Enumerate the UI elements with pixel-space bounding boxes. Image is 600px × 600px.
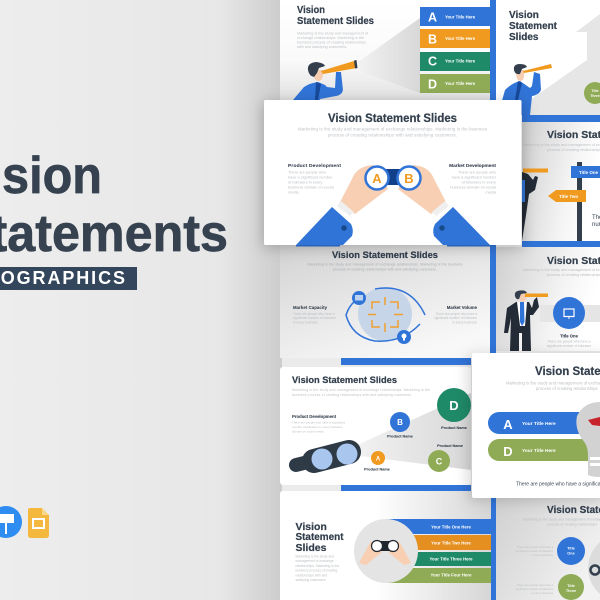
text block left lower: significant number of followers — [515, 587, 554, 591]
text block: Marketing is the study and management of exchange relationships. Marketing is the business — [298, 126, 487, 132]
text block: business process of creating — [296, 568, 337, 572]
caption: significant number of followers — [547, 344, 592, 348]
pill D: Your Title Here — [522, 448, 556, 454]
label right: significant number of followers — [434, 316, 477, 320]
label left: in every business — [293, 320, 318, 324]
signpost — [548, 162, 600, 241]
text block left upper: There are people who have a — [517, 545, 553, 549]
text block: process of creating relationships — [547, 273, 600, 277]
product B: Product Name — [387, 434, 413, 438]
title three circle — [558, 574, 584, 600]
label: domain on social media. — [292, 430, 325, 434]
list item C — [420, 52, 490, 71]
caption — [547, 334, 592, 348]
icon: man with telescope — [498, 64, 552, 115]
panel: slide with lettered list — [280, 0, 491, 100]
product D: Product Name — [441, 426, 467, 430]
product C — [428, 444, 463, 472]
icon: man with telescope — [504, 290, 548, 351]
blue circle with icon — [553, 297, 585, 329]
icon: binoculars — [296, 444, 358, 470]
bar four: Your Title Four Here — [431, 572, 472, 578]
icon: light bulb — [576, 402, 600, 477]
list item C: Your Title Here — [445, 58, 476, 64]
label left: significant number of followers — [293, 316, 336, 320]
heading: Vision — [297, 4, 325, 16]
text block — [506, 380, 600, 391]
title one circle: One — [567, 552, 575, 556]
shadow under popup slide — [468, 355, 600, 501]
text block: relationships with and — [296, 574, 327, 578]
list item D: Your Title Here — [445, 81, 476, 86]
product D — [437, 388, 471, 430]
left label: have a significant number — [288, 174, 333, 180]
text block — [292, 388, 430, 397]
panel: signpost slide — [522, 122, 600, 241]
panel: bottom right slide — [496, 498, 600, 600]
text block: exchange relationships. Marketing is the — [297, 36, 364, 40]
product C: C — [436, 456, 443, 466]
label right: Market Volume — [447, 305, 478, 310]
text block: process of creating relationships — [547, 148, 600, 152]
icon: light bulb — [397, 330, 411, 344]
bar three: Your Title Three Here — [429, 556, 473, 562]
product A — [364, 451, 390, 472]
heading: Statement — [509, 21, 558, 32]
text block — [308, 262, 463, 272]
panel: binoculars product slide — [280, 367, 471, 485]
circle with hands and binoculars — [354, 519, 418, 583]
signpost: Title One — [579, 170, 599, 175]
heading — [509, 10, 558, 43]
text block left upper: significant number of followers — [515, 549, 554, 553]
bar three — [386, 552, 491, 566]
text block — [296, 554, 339, 582]
list item A: A — [428, 10, 437, 24]
label right — [434, 305, 478, 324]
right label: have a significant number — [452, 174, 497, 180]
text block left lower: There are people who have a — [517, 583, 553, 587]
blue divider middle — [490, 245, 496, 353]
text block: process of creating relationships — [547, 522, 597, 526]
pill A: Your Title Here — [522, 421, 556, 427]
left label: business domain on social — [288, 184, 334, 190]
panel: slide top right — [496, 0, 600, 115]
label left: Market Capacity — [293, 305, 328, 310]
text block: Marketing is the study and management of exchange relationships. Marketing is the business — [308, 262, 463, 266]
text block left upper: in every business — [531, 553, 554, 557]
icon: man with telescope — [293, 60, 358, 100]
product C: Product Name — [437, 444, 463, 448]
background — [0, 0, 282, 600]
list item A — [420, 7, 490, 26]
label left: There are people who have a — [293, 312, 335, 316]
label: Product Development — [292, 414, 337, 419]
product D: D — [449, 398, 459, 413]
blue band — [341, 358, 471, 365]
text block: process of creating relationships with and satisfying customers. — [333, 268, 437, 272]
heading: Slides — [509, 32, 539, 43]
title one circle: Title — [567, 546, 575, 550]
main title — [0, 147, 228, 263]
bar one: Your Title One Here — [431, 524, 471, 530]
text block — [298, 126, 487, 138]
pill A: A — [503, 417, 513, 432]
title three circle: Three — [566, 589, 576, 593]
green circle: Title — [591, 89, 599, 93]
blue divider top — [490, 0, 496, 115]
text block: business process of creating relationships — [297, 40, 366, 44]
light beam — [358, 18, 420, 93]
left label: Product Development — [288, 163, 341, 169]
text block — [297, 32, 368, 49]
heading: Vision — [509, 10, 539, 21]
pill D: D — [503, 444, 513, 459]
label: number of followers in every business — [292, 425, 343, 429]
list item D: D — [428, 78, 437, 92]
panel: popup bulb slide — [472, 353, 600, 498]
icon: binocular ring — [590, 566, 600, 574]
text block — [523, 143, 600, 152]
product A: Product Name — [364, 468, 390, 472]
panel: four titles slide — [280, 491, 491, 600]
label — [292, 414, 345, 434]
heading — [297, 4, 374, 27]
blue band — [341, 485, 471, 491]
panel: man and circle slide — [496, 247, 600, 351]
right label: Market Development — [449, 163, 496, 169]
text block: process of creating relationships with and satisfying customers. — [328, 132, 457, 138]
title one circle — [557, 537, 585, 565]
binoculars A and B: A — [372, 171, 382, 186]
right label: media — [485, 190, 497, 194]
text block — [592, 215, 600, 228]
text block: process of creating relationships — [536, 386, 598, 391]
caption: There are people who have a — [548, 340, 591, 344]
panel: bottom-edge blue band top right — [522, 115, 600, 122]
text block: with and satisfying customers. — [297, 45, 347, 49]
blue divider bottom — [491, 498, 496, 600]
list item B: B — [428, 32, 437, 46]
left label: of followers in every — [288, 180, 322, 184]
heading: Vision Statement Slides — [328, 113, 457, 125]
eye diagram — [346, 287, 425, 344]
bar four — [386, 568, 491, 583]
icon: google slides — [28, 508, 49, 538]
shadow under center slide — [262, 102, 524, 248]
label left — [293, 305, 336, 324]
product B — [387, 412, 413, 438]
left label — [288, 163, 341, 194]
text block: Marketing is the study and — [296, 554, 334, 558]
label right: There are people who have a — [436, 312, 477, 316]
right hand and sleeve — [398, 165, 490, 245]
text block: management of exchange — [296, 559, 334, 563]
left label: There are people who — [288, 170, 326, 174]
product A: A — [376, 456, 381, 462]
list item D — [420, 74, 490, 93]
text block: satisfying customers. — [296, 578, 326, 582]
left label: media. — [288, 190, 300, 194]
list item C: C — [428, 54, 437, 68]
bar two: Your Title Two Here — [431, 540, 471, 546]
right label: There are people who — [458, 170, 496, 174]
binoculars A and B — [366, 166, 420, 190]
panel: eye focus slide — [280, 245, 491, 358]
bar two — [386, 535, 491, 550]
bar one — [386, 519, 491, 534]
right label: of followers in every — [462, 180, 496, 184]
light arrow shape — [530, 14, 600, 115]
signpost: Title Two — [559, 194, 578, 199]
panel: blue band — [522, 241, 600, 247]
right label — [449, 163, 497, 194]
binoculars A and B: B — [404, 171, 414, 186]
panel: center binoculars slide — [264, 100, 522, 245]
list item B: Your Title Here — [445, 36, 476, 41]
large gray circle — [588, 534, 600, 600]
pill D — [488, 439, 600, 461]
green circle: Three — [590, 94, 600, 98]
icon: man with telescope — [522, 168, 548, 241]
text block left lower: in every business — [531, 591, 554, 595]
green circle — [584, 82, 600, 104]
list item B — [420, 29, 490, 48]
list item A: Your Title Here — [445, 14, 476, 20]
caption: Title One — [560, 334, 579, 338]
heading — [296, 521, 344, 554]
text block: Marketing is the study and management of exchange relationships. Marketing is the — [292, 388, 430, 392]
heading: Statement Slides — [297, 15, 374, 27]
text block left upper — [515, 545, 554, 557]
icon: keynote — [0, 506, 22, 538]
heading: Slides — [296, 542, 327, 554]
heading: Vision — [296, 521, 327, 533]
product B: B — [397, 418, 403, 427]
right label: business domain on social — [450, 184, 496, 190]
label: There are people who have a significant — [292, 420, 345, 424]
pill A — [488, 412, 600, 434]
text block: business process of creating relationships with and satisfying customers. — [292, 393, 412, 397]
heading: Vision Statement Slides — [292, 375, 397, 386]
light beam — [355, 393, 471, 470]
text block: Marketing is the study and management of — [297, 32, 368, 36]
text block — [523, 518, 600, 526]
left hand and sleeve — [296, 165, 388, 245]
heading: Vision Statement Slides — [332, 250, 438, 261]
text block — [523, 268, 600, 277]
label right: in every business — [452, 320, 477, 324]
text block: relationships. Marketing is the — [296, 564, 339, 568]
icon: monitor — [352, 291, 366, 305]
text block left lower — [515, 583, 554, 595]
heading: Statement — [296, 531, 344, 543]
title three circle: Title — [567, 584, 575, 588]
